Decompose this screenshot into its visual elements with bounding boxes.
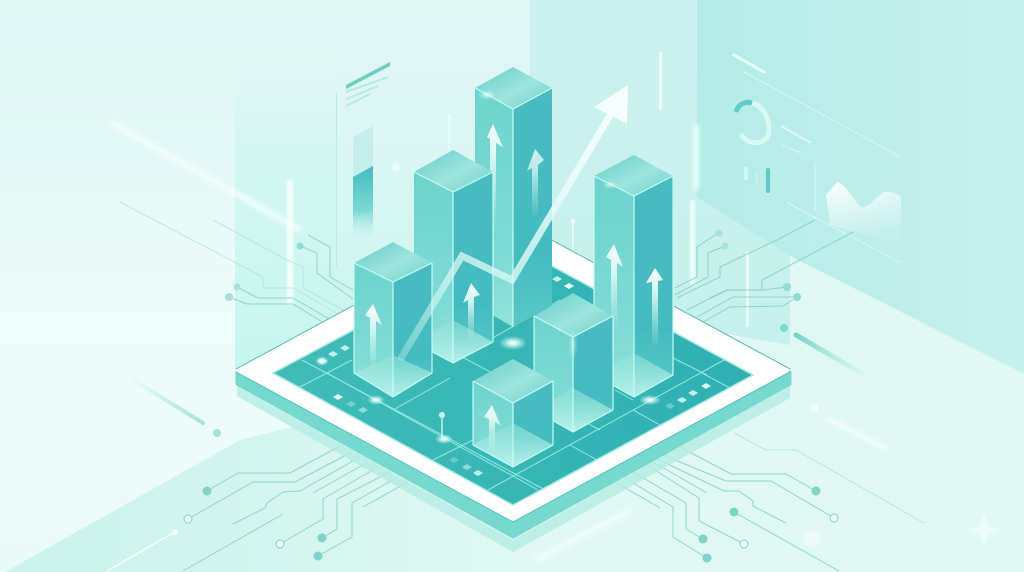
platform shadow — [237, 385, 790, 552]
floor seen through glass — [354, 355, 432, 397]
bar: tall right — [594, 155, 673, 397]
panel bar — [353, 126, 373, 240]
arrow up — [365, 304, 382, 372]
light glints — [315, 90, 661, 444]
arrow up — [646, 268, 663, 348]
bar: middle right — [534, 293, 613, 432]
bar: front cube — [473, 359, 553, 467]
arrow up — [487, 124, 503, 232]
dashboard header lines — [734, 55, 901, 263]
arrow up — [527, 149, 544, 218]
panel text lines — [346, 77, 388, 106]
platform teal surface — [273, 245, 753, 505]
platform white frame — [238, 222, 787, 519]
floor seen through glass — [414, 320, 493, 363]
circuit traces: lower left — [183, 446, 408, 571]
donut chart — [736, 102, 769, 143]
bar: tallest — [475, 67, 552, 327]
icon: sparkle bottom right — [968, 514, 1000, 546]
floor seen through glass — [594, 353, 673, 397]
pin above second bar — [447, 115, 451, 150]
bar: left — [354, 242, 432, 397]
floor band lower left — [5, 425, 700, 572]
platform indicator squares — [317, 276, 711, 476]
panel: left glass column — [235, 65, 336, 375]
panel: middle translucent glass — [530, 0, 790, 345]
platform side — [237, 372, 790, 537]
mini bar chart — [744, 167, 770, 193]
panel: right dashboard glass — [693, 0, 1024, 374]
arrow up — [463, 283, 480, 342]
platform grid — [298, 300, 730, 499]
area chart — [826, 182, 901, 245]
panel title bar — [346, 62, 390, 89]
panel edge glow — [693, 125, 699, 190]
trend arrow — [400, 85, 628, 360]
panel: left floating glass with bar — [336, 62, 390, 267]
arrow up — [606, 244, 623, 332]
pin right of tallest bar — [571, 219, 575, 250]
vertical light pillars — [287, 52, 749, 327]
glow streaks — [107, 122, 887, 571]
bar: second — [414, 150, 493, 363]
platform — [236, 219, 790, 552]
arrow up — [484, 405, 501, 452]
floor seen through glass — [534, 388, 613, 432]
platform pin — [439, 412, 445, 440]
floor seen through glass — [473, 423, 553, 467]
circuit traces: lower right — [617, 433, 924, 571]
circuit traces: upper right — [675, 220, 853, 322]
circuit traces: upper left — [120, 202, 353, 328]
